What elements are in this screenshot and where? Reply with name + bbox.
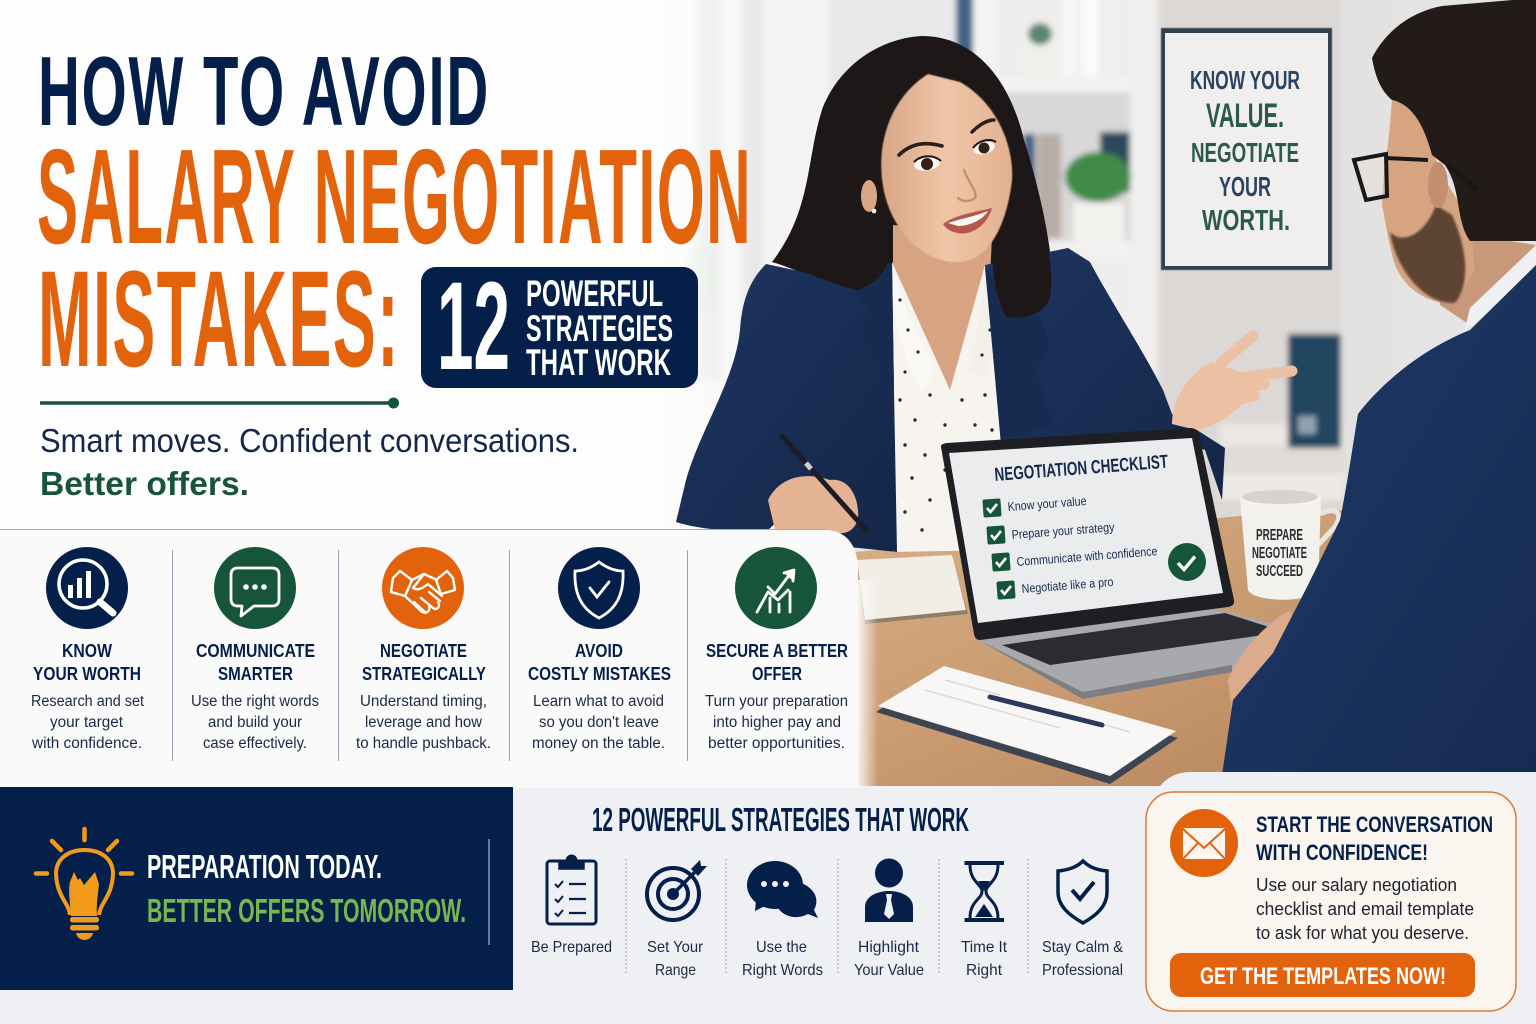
bottom strip background bbox=[0, 772, 1536, 1024]
icon: light bulb bbox=[36, 829, 132, 940]
description: Use the right words bbox=[191, 693, 319, 710]
left fade into white bbox=[600, 0, 770, 555]
strategy: set your range bbox=[647, 860, 707, 979]
tagline bbox=[147, 848, 466, 929]
man's hand bbox=[1228, 610, 1300, 715]
man's hair bbox=[1372, 0, 1536, 241]
mug bbox=[1240, 490, 1339, 600]
panel: preparation banner bbox=[0, 787, 513, 990]
icon: rising chart bbox=[735, 547, 817, 629]
icon: chat bubbles bbox=[747, 861, 818, 918]
man's beard bbox=[1390, 205, 1465, 303]
label: Be Prepared bbox=[531, 939, 612, 956]
poster: know your value: WORTH. bbox=[1202, 205, 1290, 237]
heading: NEGOTIATE bbox=[380, 640, 467, 661]
heading bbox=[196, 640, 315, 684]
heading: KNOW bbox=[62, 640, 112, 661]
mug: NEGOTIATE bbox=[1252, 545, 1307, 562]
title: HOW TO AVOID bbox=[38, 36, 490, 146]
call to action text: checklist and email template bbox=[1256, 899, 1474, 919]
icon: handshake bbox=[382, 547, 464, 629]
badge: 12 powerful strategies: STRATEGIES bbox=[526, 308, 673, 349]
column: avoid costly mistakes bbox=[528, 547, 671, 752]
eyebrows bbox=[899, 144, 942, 155]
icon: speech bubble bbox=[214, 547, 296, 629]
heading bbox=[706, 640, 848, 684]
label: Set Your bbox=[647, 939, 704, 956]
description: Learn what to avoid bbox=[533, 693, 664, 710]
screen bezel bbox=[941, 428, 1234, 640]
column: communicate smarter bbox=[191, 547, 319, 752]
strategy: be prepared bbox=[531, 855, 612, 956]
description: into higher pay and bbox=[713, 714, 841, 731]
column: know your worth bbox=[31, 547, 145, 752]
description: better opportunities. bbox=[708, 735, 845, 752]
heading: COSTLY MISTAKES bbox=[528, 663, 671, 684]
checklist items: Negotiate like a pro bbox=[1021, 575, 1114, 596]
screen bbox=[949, 438, 1223, 623]
label: Time It bbox=[961, 939, 1008, 956]
hair lock left bbox=[772, 60, 890, 290]
label bbox=[961, 939, 1008, 979]
heading bbox=[528, 640, 671, 684]
icon: envelope bbox=[1170, 809, 1238, 877]
description: Research and set bbox=[31, 693, 145, 710]
heading: OFFER bbox=[752, 663, 802, 684]
poster: know your value bbox=[1161, 28, 1332, 270]
label bbox=[854, 939, 924, 979]
heading: COMMUNICATE bbox=[196, 640, 315, 661]
woman bbox=[676, 36, 1292, 552]
mug: SUCCEED bbox=[1256, 563, 1303, 580]
icon: person with tie bbox=[865, 858, 913, 922]
face bbox=[881, 74, 1012, 262]
label bbox=[1042, 939, 1123, 979]
man's shirt collar bbox=[1464, 245, 1536, 332]
hair lock right bbox=[990, 80, 1051, 318]
laptop base bbox=[978, 607, 1288, 699]
title underline bbox=[40, 398, 399, 408]
button: GET THE TEMPLATES NOW! bbox=[1200, 963, 1446, 990]
earring bbox=[872, 209, 876, 213]
label: Professional bbox=[1042, 962, 1123, 979]
heading: SECURE A BETTER bbox=[706, 640, 848, 661]
badge: 12 powerful strategies bbox=[421, 257, 698, 396]
clipboard with paper and pen bbox=[876, 666, 1178, 784]
subtitle: Better offers. bbox=[40, 465, 249, 502]
panel: call to action bbox=[1146, 792, 1516, 1011]
heading bbox=[33, 640, 141, 684]
mouth bbox=[943, 208, 992, 233]
panel: key ideas background bbox=[0, 530, 858, 786]
man's ear bbox=[1428, 162, 1448, 208]
checklist items: Prepare your strategy bbox=[1011, 520, 1116, 542]
pen bbox=[782, 436, 866, 530]
man bbox=[1222, 0, 1536, 775]
man's neck bbox=[1436, 200, 1536, 325]
icon: target bbox=[647, 860, 707, 920]
badge: 12 powerful strategies: POWERFUL bbox=[526, 273, 663, 314]
strategy: highlight your value bbox=[854, 858, 924, 979]
call to action text bbox=[1256, 875, 1474, 943]
blazer left side bbox=[676, 262, 897, 552]
label: Right bbox=[966, 962, 1003, 979]
tagline: BETTER OFFERS TOMORROW. bbox=[147, 892, 466, 929]
subtitle bbox=[40, 422, 579, 502]
lapel left bbox=[848, 262, 894, 392]
heading: AVOID bbox=[575, 640, 623, 661]
call to action heading: WITH CONFIDENCE! bbox=[1256, 840, 1428, 865]
description: with confidence. bbox=[31, 735, 142, 752]
hair back bbox=[772, 36, 1053, 320]
panel fade edge bbox=[856, 580, 878, 786]
poster: know your value: KNOW YOUR bbox=[1190, 65, 1300, 95]
title: MISTAKES: bbox=[38, 243, 400, 396]
icon: magnifier with bars bbox=[46, 547, 128, 629]
title bbox=[37, 36, 752, 396]
poster: know your value: NEGOTIATE bbox=[1191, 137, 1299, 168]
heading: SMARTER bbox=[218, 663, 293, 684]
checklist items bbox=[982, 494, 1158, 600]
description bbox=[532, 693, 665, 752]
eyes bbox=[913, 156, 941, 172]
description: Understand timing, bbox=[360, 693, 487, 710]
strategy: time it right bbox=[961, 861, 1008, 979]
description: Turn your preparation bbox=[705, 693, 848, 710]
description: case effectively. bbox=[203, 735, 307, 752]
table bbox=[855, 500, 1536, 790]
laptop bbox=[941, 428, 1288, 699]
description: your target bbox=[50, 714, 124, 731]
heading bbox=[362, 640, 487, 684]
checklist items: Communicate with confidence bbox=[1016, 544, 1158, 569]
call to action text: to ask for what you deserve. bbox=[1256, 923, 1469, 943]
description bbox=[705, 693, 848, 752]
big check badge bbox=[1168, 543, 1206, 581]
strategies heading: 12 POWERFUL STRATEGIES THAT WORK bbox=[592, 801, 969, 838]
man's face bbox=[1382, 100, 1475, 303]
heading: YOUR WORTH bbox=[33, 663, 141, 684]
label: Highlight bbox=[858, 939, 920, 956]
neck bbox=[893, 225, 992, 395]
call to action heading bbox=[1256, 812, 1493, 865]
description: money on the table. bbox=[532, 735, 665, 752]
pen hand bbox=[768, 476, 858, 533]
blouse bbox=[892, 262, 1002, 552]
description bbox=[191, 693, 319, 752]
description: so you don't leave bbox=[539, 714, 659, 731]
checklist title: NEGOTIATION CHECKLIST bbox=[994, 452, 1169, 486]
heading: STRATEGICALLY bbox=[362, 663, 487, 684]
poster: know your value: VALUE. bbox=[1206, 97, 1284, 135]
description: leverage and how bbox=[365, 714, 483, 731]
icon: clipboard bbox=[547, 855, 596, 924]
label bbox=[647, 939, 704, 979]
label: Your Value bbox=[854, 962, 924, 979]
icon: shield bbox=[1058, 861, 1107, 923]
button bbox=[1170, 953, 1475, 997]
poster: know your value: YOUR bbox=[1219, 171, 1271, 202]
label: Right Words bbox=[742, 962, 823, 979]
tagline: PREPARATION TODAY. bbox=[147, 848, 382, 885]
description bbox=[31, 693, 145, 752]
strategy: use the right words bbox=[742, 861, 823, 979]
man's glasses bbox=[1354, 154, 1478, 200]
blazer right side bbox=[985, 248, 1225, 500]
ear bbox=[861, 180, 877, 212]
badge: 12 powerful strategies: 12 bbox=[437, 257, 510, 396]
checklist items: Know your value bbox=[1007, 494, 1087, 514]
icon: hourglass bbox=[964, 861, 1004, 922]
description: to handle pushback. bbox=[356, 735, 491, 752]
nose bbox=[958, 170, 976, 201]
label: Range bbox=[655, 962, 696, 979]
photo: blurred office background bbox=[640, 0, 1536, 790]
keyboard bbox=[1002, 613, 1285, 665]
gesturing hand bbox=[1172, 336, 1292, 430]
column: secure a better offer bbox=[705, 547, 848, 752]
strategy: stay calm and professional bbox=[1042, 861, 1123, 979]
description bbox=[356, 693, 491, 752]
blouse dots bbox=[898, 298, 994, 532]
description: and build your bbox=[208, 714, 302, 731]
label: Stay Calm & bbox=[1042, 939, 1123, 956]
mug: PREPARE bbox=[1256, 527, 1303, 544]
subtitle: Smart moves. Confident conversations. bbox=[40, 422, 579, 459]
label bbox=[742, 939, 823, 979]
man's blazer bbox=[1222, 265, 1536, 775]
open notebook on table bbox=[857, 555, 968, 624]
column: negotiate strategically bbox=[356, 547, 491, 752]
badge: 12 powerful strategies: THAT WORK bbox=[526, 342, 671, 383]
icon: shield check bbox=[558, 547, 640, 629]
call to action text: Use our salary negotiation bbox=[1256, 875, 1457, 895]
label: Use the bbox=[756, 939, 807, 956]
